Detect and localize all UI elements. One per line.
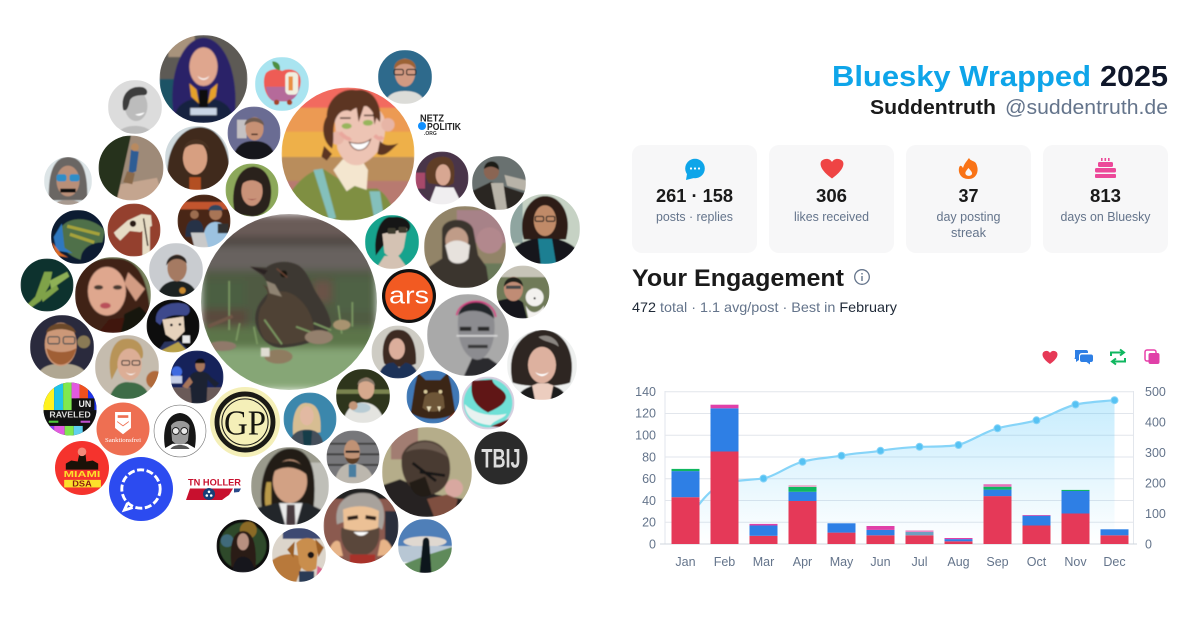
avatar: woman with baby: [336, 369, 390, 423]
month labels: Jan: [675, 555, 696, 569]
user name and handle: @suddentruth.de: [1005, 97, 1168, 119]
month labels: Aug: [947, 555, 970, 569]
avatar: bearded mascot: [324, 488, 398, 565]
avatar: person with mask among blossoms: [424, 206, 506, 288]
stat card: posts and replies: [632, 145, 757, 253]
avatar: woman in white: [416, 152, 468, 204]
avatar: brown dog: [272, 528, 326, 582]
logo: TBIJ: TBIJ: [481, 444, 521, 474]
left axis labels: 140: [635, 385, 656, 399]
stat card: days on Bluesky: 813: [1090, 186, 1121, 206]
avatar: woman selfie with earring: [75, 257, 151, 333]
avatar: man at night with police lights: [170, 350, 224, 404]
logo: Miami DSA: DSA: [72, 479, 92, 488]
avatar: man on grey: [149, 243, 203, 297]
stat card: posting streak: [906, 145, 1031, 253]
avatar: red heart with wave: [462, 376, 514, 430]
avatar: glitch portrait: [427, 294, 509, 376]
stat card: days on Bluesky: days on Bluesky: [1060, 210, 1151, 224]
left axis labels: [635, 385, 656, 551]
right axis labels: 400: [1145, 416, 1166, 430]
avatar: woman in dark forest: [216, 520, 270, 572]
heading: Your Engagement: Your Engagement: [632, 265, 844, 292]
right axis labels: 100: [1145, 507, 1166, 521]
logo: Signal: [109, 457, 173, 521]
logo: Sanktionsfrei: Sanktionsfrei: [105, 437, 141, 444]
month labels: Nov: [1064, 555, 1087, 569]
logo: Miami DSA: MIAMI: [64, 469, 100, 479]
logo: Unraveled: [44, 382, 96, 436]
avatar: blonde woman on blue: [284, 392, 336, 446]
logo: Unraveled: RAVELED: [49, 410, 91, 419]
avatar: cartoon Kronk: [365, 215, 419, 269]
stat card: likes received: [769, 145, 894, 253]
icon: quotes: [1145, 350, 1160, 364]
month labels: Mar: [753, 555, 774, 569]
month labels: Apr: [793, 555, 812, 569]
avatar: black and white man: [108, 80, 162, 134]
logo: ars technica: ars: [389, 283, 429, 310]
left axis labels: 120: [635, 407, 656, 421]
avatar: green mantis: [21, 258, 74, 312]
avatar: cartoon bear: [406, 370, 460, 424]
avatar: woman with curly brown hair: [165, 126, 229, 190]
left axis labels: 0: [649, 537, 656, 551]
icon: chat bubble: [685, 159, 705, 180]
stat card: posts and replies: posts · replies: [656, 210, 733, 224]
right axis labels: [1145, 385, 1166, 551]
stat card: likes received: likes received: [794, 210, 869, 224]
left axis labels: 40: [642, 494, 656, 508]
avatar: woman with navy dress: [372, 326, 424, 378]
avatar: woman with black hair: [226, 164, 278, 216]
stat card: posting streak: day posting: [936, 210, 1001, 224]
chart legend: [1043, 350, 1160, 364]
logo: netzpolitik.org: [418, 112, 461, 137]
stat card: posting streak: 37: [958, 186, 978, 206]
month labels: Jun: [870, 555, 891, 569]
avatar: woman with teal top: [510, 194, 580, 264]
title: 2025: [1100, 61, 1168, 93]
month labels: May: [830, 555, 854, 569]
avatar: anime character: [146, 300, 200, 352]
avatar: blonde woman with glasses: [95, 335, 164, 399]
month labels: Jul: [912, 555, 927, 569]
logo: GP: GP: [224, 404, 266, 443]
month labels: Sep: [986, 555, 1009, 569]
avatar: animal skull on red: [108, 204, 160, 257]
engagement chart: [635, 385, 1166, 569]
left axis labels: 80: [642, 450, 656, 464]
stacked bars: [672, 405, 1128, 544]
avatar collage: [21, 35, 580, 582]
logo: Miami DSA: [55, 441, 109, 495]
avatar: man with glasses on blue: [378, 50, 432, 104]
avatar: colorful fish: [51, 210, 105, 264]
right axis labels: 500: [1145, 385, 1166, 399]
month labels: Feb: [714, 555, 735, 569]
logo: TN Holler: [186, 478, 242, 500]
icon: likes: [1043, 351, 1057, 364]
icon: heart: [821, 159, 843, 178]
avatar: illustrated character with green sweater: [282, 88, 414, 220]
logo: ars technica: [382, 269, 436, 323]
right axis labels: 0: [1145, 537, 1152, 551]
cumulative area and line: [686, 397, 1118, 544]
title: Bluesky Wrapped: [832, 61, 1091, 93]
stat card: posting streak: streak: [951, 226, 987, 240]
logo: netzpolitik.org: NETZ: [420, 112, 445, 124]
user name and handle: [870, 97, 1168, 119]
month labels: Oct: [1027, 555, 1047, 569]
icon: replies: [1075, 350, 1093, 364]
icon: info: [855, 270, 869, 284]
avatar: woman with purple hair: [160, 35, 248, 123]
avatar: bearded man before wood wall: [326, 430, 380, 484]
month labels: Dec: [1103, 555, 1126, 569]
engagement summary: 472 total · 1.1 avg/post · Best in February: [632, 299, 897, 315]
avatar: woman with curly grey hair: [507, 330, 577, 400]
avatar: man with cap: [228, 106, 280, 160]
logo: Sanktionsfrei: [96, 402, 150, 456]
stat card: days on Bluesky: [1043, 145, 1168, 253]
avatar: man with scarf: [472, 156, 526, 210]
avatar: Asian woman with tie: [251, 447, 329, 525]
month labels: [675, 555, 1126, 569]
logo: TN Holler: TN HOLLER: [188, 478, 242, 488]
logo: GP: [210, 387, 280, 457]
avatar: bearded man smiling: [30, 315, 94, 379]
left axis labels: 20: [642, 516, 656, 530]
icon: flame: [959, 158, 978, 179]
icon: birthday cake: [1095, 158, 1116, 178]
avatar: bald man with glasses: [382, 427, 472, 517]
avatar: apple logo: [255, 57, 309, 111]
logo: netzpolitik.org: POLITIK: [427, 121, 461, 133]
left axis labels: 100: [635, 428, 656, 442]
avatar: men in a bar: [178, 194, 230, 248]
avatar: climber on rock: [98, 136, 164, 200]
icon: reposts: [1111, 350, 1125, 364]
right axis labels: 200: [1145, 477, 1166, 491]
avatar: lake scene: [398, 519, 452, 573]
right axis labels: 300: [1145, 446, 1166, 460]
avatar: large bird in grass: [201, 214, 377, 390]
logo: netzpolitik.org: .ORG: [424, 131, 437, 137]
avatar: man in blue sunglasses: [44, 157, 92, 205]
logo: Unraveled: UN: [78, 399, 91, 409]
user name and handle: Suddentruth: [870, 97, 996, 119]
logo: TBIJ: [474, 432, 528, 484]
left axis labels: 60: [642, 472, 656, 486]
avatar: man with white dog: [496, 266, 550, 318]
stat card: likes received: 306: [816, 186, 847, 206]
avatar: sketch of girl with glasses: [154, 405, 206, 457]
stat card: posts and replies: 261 · 158: [656, 186, 733, 206]
